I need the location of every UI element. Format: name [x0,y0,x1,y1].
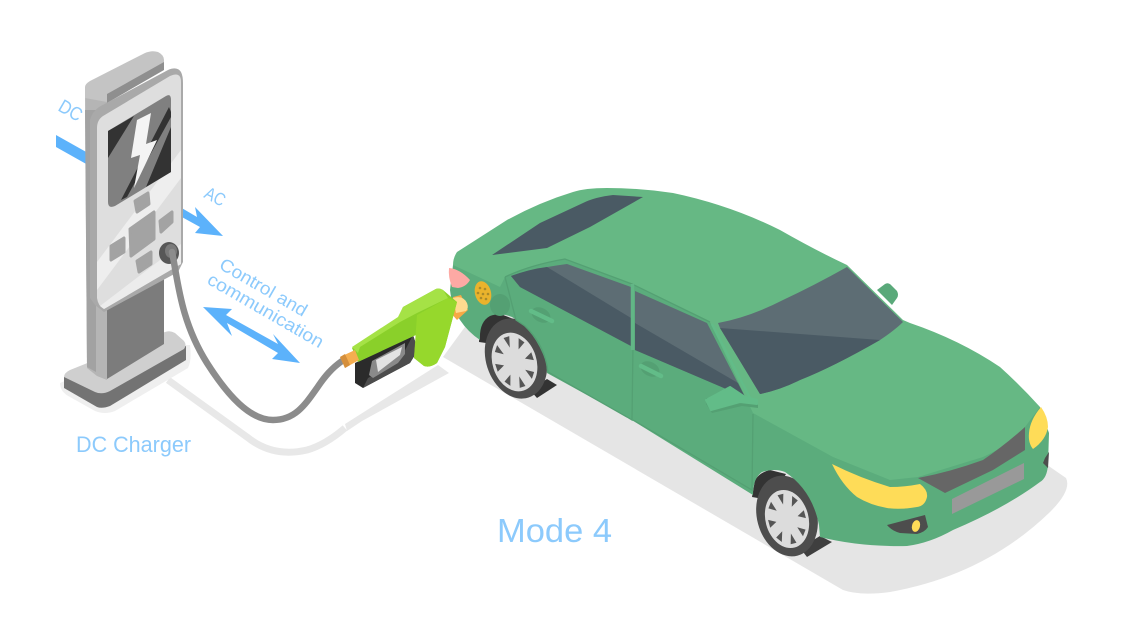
car rear door handle [529,304,553,326]
nozzle handle and head [352,288,457,367]
charger cable socket [159,242,179,264]
cable and nozzle ground shadow [168,365,449,452]
nozzle grip guard [355,335,418,388]
charger column [85,51,164,380]
car fog lamp [887,515,928,534]
control and communication double arrow [203,307,300,363]
car grille [918,427,1025,493]
charging nozzle [340,288,468,388]
DC input arrow [56,135,88,165]
charging cable [172,252,342,420]
car upper body: trunk, roof and hood [453,188,1040,480]
label: Control and: Control and [216,254,311,320]
charger screen with lightning bolt [108,95,171,207]
AC output arrow [180,207,223,236]
car rear wheel arch shadow [479,313,516,345]
label: communication: communication [204,269,327,352]
car fuel door [490,294,510,316]
car door pillar highlight [631,284,634,350]
car taillight [449,268,470,288]
icon: lightning bolt [131,113,157,188]
car rear window [492,195,643,255]
car front side window [635,291,745,397]
car near mirror [706,387,758,413]
label: DC: DC [54,96,86,126]
car headlight left [832,464,927,509]
car windshield [718,267,903,394]
car front wheel [747,469,832,563]
car rear side window [511,264,631,346]
charger front panel [90,68,183,312]
car [449,188,1049,563]
charger control buttons [111,193,172,272]
label: DC Charger: DC Charger [76,432,191,457]
car headlight right [1029,407,1048,449]
car rear wheel [475,310,557,407]
car ground shadow [443,300,1067,594]
car A-pillar highlight [712,324,752,402]
label: Mode 4: Mode 4 [497,512,612,549]
car license plate [952,463,1024,514]
charger base [60,331,191,413]
nozzle hose collar [340,350,359,368]
car side trim lines [505,259,753,490]
charge port cover [472,279,494,307]
car far mirror [877,283,898,305]
label: AC: AC [201,183,229,210]
car side vent [1043,452,1049,468]
car lower body side [450,250,1049,546]
car front door handle [638,358,662,380]
car front wheel arch shadow [752,470,786,500]
nozzle connector tip [450,295,468,320]
DC charger station [60,51,191,413]
